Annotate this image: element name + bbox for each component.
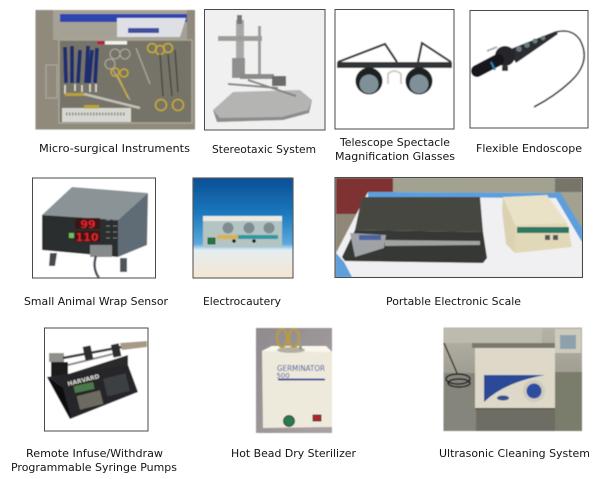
label: telescope spectacle: Telescope Spectacle (339, 136, 450, 149)
panel: telescope spectacle magnification glasses (335, 10, 455, 163)
label: flexible endoscope: Flexible Endoscope (476, 142, 582, 155)
frame: scale (335, 178, 582, 278)
photo: monitor device (32, 178, 156, 278)
frame: syringe pump (44, 328, 148, 431)
label: portable electronic scale: Portable Electronic Scale (386, 295, 521, 308)
panel: stereotaxic system (204, 10, 325, 156)
photo: sterilizer (256, 328, 332, 433)
photo: monitor device: 110 (76, 231, 99, 244)
frame: electrocautery (193, 178, 293, 278)
photo: sterilizer: GERMINATOR (277, 364, 325, 373)
photo: instrument tray (36, 10, 195, 130)
panel: small animal wrap sensor (24, 178, 168, 308)
frame: stereotaxic (204, 10, 325, 130)
photo: telescope spectacles (335, 10, 454, 129)
photo: syringe pump: HARVARD (67, 373, 100, 388)
photo: ultrasonic cleaner (444, 328, 582, 431)
label: electrocautery: Electrocautery (203, 295, 281, 308)
photo: electrocautery unit (193, 178, 293, 278)
panel: electrocautery (193, 178, 293, 308)
label: micro-surgical instruments: Micro-surgical Instruments (39, 142, 190, 155)
label: stereotaxic system: Stereotaxic System (212, 143, 316, 156)
panel: micro-surgical instruments (36, 10, 195, 155)
photo: sterilizer: 500 (276, 372, 290, 380)
label: remote infuse/withdraw: Remote Infuse/Withdraw (26, 447, 163, 460)
photo: monitor device: 99 (80, 218, 96, 231)
label: ultrasonic cleaning system: Ultrasonic Cleaning System (439, 447, 590, 460)
photo: syringe pump (44, 328, 148, 431)
panel: ultrasonic cleaning system (439, 328, 590, 460)
label: magnification glasses: Magnification Glasses (335, 150, 455, 163)
photo: caliper case and scale (335, 178, 582, 278)
frame: endoscope (470, 10, 588, 128)
label: hot bead dry sterilizer: Hot Bead Dry Sterilizer (231, 447, 356, 460)
panel: flexible endoscope (470, 10, 588, 155)
photo: endoscope (470, 10, 588, 128)
label: small animal wrap sensor: Small Animal Wrap Sensor (24, 295, 168, 308)
panel: hot bead dry sterilizer (231, 328, 356, 460)
frame: wrap sensor (32, 178, 156, 278)
frame: telescope (335, 10, 454, 129)
panel: portable electronic scale (335, 178, 582, 308)
panel: syringe pumps (11, 328, 177, 474)
photo: stereotaxic frame (204, 10, 325, 130)
label: programmable syringe pumps: Programmable Syringe Pumps (11, 461, 177, 474)
